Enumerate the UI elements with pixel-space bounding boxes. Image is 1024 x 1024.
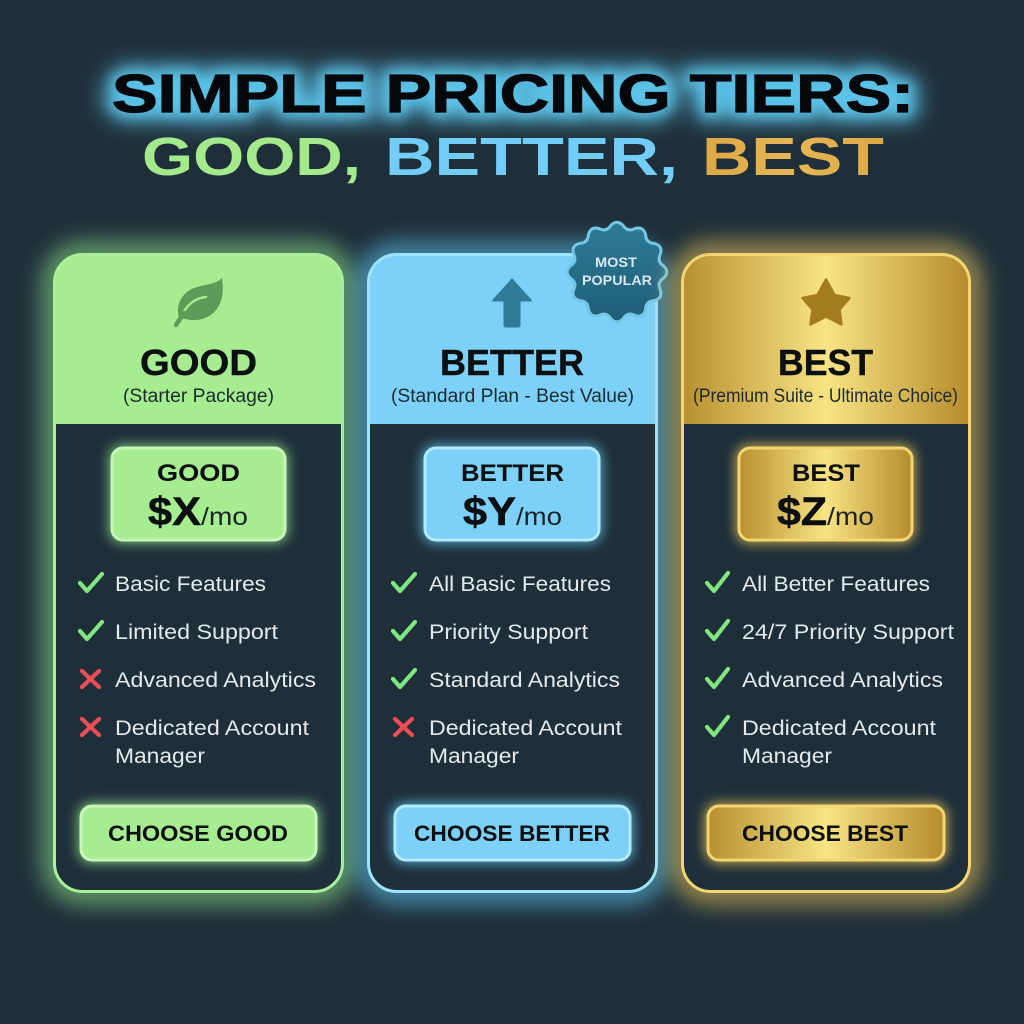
feature list: good: Dedicated Account	[115, 716, 309, 740]
heading: best: BEST	[778, 342, 873, 383]
feature list: better: Priority Support	[429, 620, 588, 644]
feature list: best: Dedicated Account	[742, 716, 936, 740]
price box: best: BEST	[792, 460, 860, 487]
feature list: best: Advanced Analytics	[742, 668, 943, 692]
icon: up arrow	[493, 279, 531, 327]
badge: most popular: POPULAR	[582, 272, 652, 288]
feature list: good: Advanced Analytics	[115, 668, 316, 692]
button: choose better	[392, 803, 633, 863]
icon: star	[802, 280, 850, 324]
button: choose good: CHOOSE GOOD	[108, 821, 288, 846]
price box: good: /mo	[201, 503, 248, 531]
feature list: good: Basic Features	[115, 572, 266, 596]
feature list: best	[707, 572, 954, 768]
title: SIMPLE PRICING TIERS:	[112, 64, 914, 124]
badge: most popular: MOST	[595, 254, 637, 270]
icon: leaf	[176, 278, 223, 325]
price box: better: BETTER	[461, 460, 564, 487]
heading: better: BETTER	[440, 342, 584, 383]
panel: better tier	[368, 222, 667, 892]
button: choose good	[78, 803, 319, 863]
price box: best: /mo	[827, 503, 874, 531]
subtitle: better: (Standard Plan - Best Value)	[391, 386, 634, 407]
header: good	[54, 254, 343, 424]
price box: better: /mo	[516, 503, 562, 531]
feature list: better: Standard Analytics	[429, 668, 620, 692]
feature list: best: 24/7 Priority Support	[742, 620, 954, 644]
button: choose best	[705, 803, 947, 863]
feature list: better: All Basic Features	[429, 572, 611, 596]
title word: good: GOOD,	[142, 127, 361, 187]
feature list: better: Dedicated Account	[429, 716, 622, 740]
button: choose best: CHOOSE BEST	[742, 821, 909, 846]
feature list: better: Manager	[429, 744, 519, 768]
badge: most popular	[567, 222, 667, 322]
subtitle: best: (Premium Suite - Ultimate Choice)	[693, 386, 958, 407]
feature list: better	[393, 572, 622, 768]
price box: best: $Z	[777, 490, 827, 534]
panel: best tier	[682, 254, 970, 892]
title	[112, 64, 914, 187]
title word: better: BETTER,	[385, 127, 678, 187]
feature list: good: Manager	[115, 744, 205, 768]
price box: good: $X	[148, 490, 201, 534]
subtitle: good: (Starter Package)	[123, 386, 274, 407]
header: best	[682, 254, 970, 424]
feature list: good	[80, 572, 316, 768]
price box: best	[736, 445, 915, 543]
price box: better: $Y	[463, 490, 516, 534]
feature list: best: All Better Features	[742, 572, 930, 596]
price box: good: GOOD	[157, 460, 240, 487]
title word: best: BEST	[702, 127, 884, 187]
header: better	[368, 254, 657, 424]
panel: good tier	[54, 254, 343, 892]
price box: good	[109, 445, 288, 543]
title: SIMPLE PRICING TIERS:	[112, 64, 914, 124]
price box: better	[422, 445, 602, 543]
feature list: best: Manager	[742, 744, 832, 768]
feature list: good: Limited Support	[115, 620, 278, 644]
heading: good: GOOD	[140, 342, 257, 383]
title: SIMPLE PRICING TIERS:	[112, 64, 914, 124]
button: choose better: CHOOSE BETTER	[414, 821, 610, 846]
